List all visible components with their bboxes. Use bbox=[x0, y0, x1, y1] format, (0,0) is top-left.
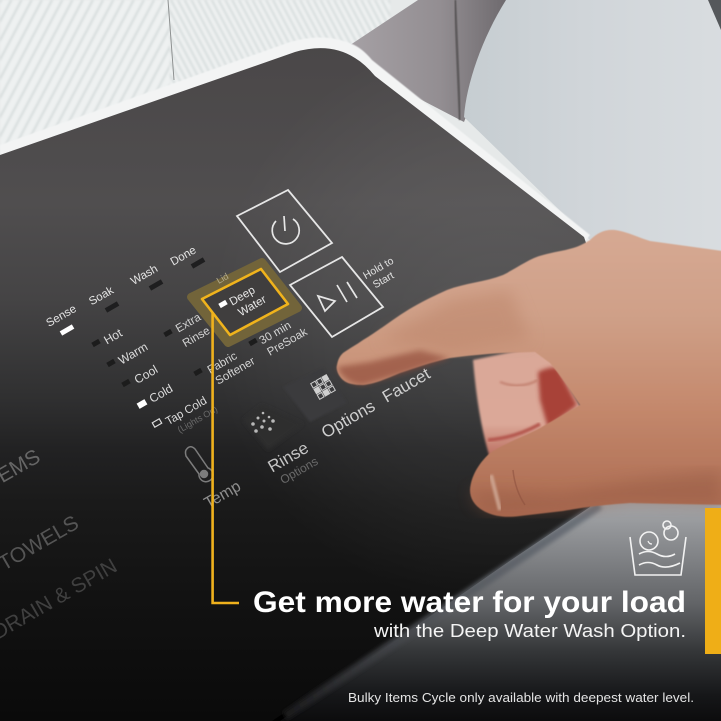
middle finger bbox=[473, 345, 585, 458]
wash options: PreSoak bbox=[265, 326, 310, 359]
headline: Get more water for your load bbox=[253, 586, 686, 619]
thermometer icon bbox=[186, 447, 213, 482]
wash options: Fabric bbox=[206, 350, 240, 377]
deep water highlight: Deep bbox=[228, 284, 257, 308]
index finger tone bbox=[380, 290, 530, 352]
temperature options: Warm bbox=[116, 340, 150, 367]
soft light on right of panel bbox=[312, 144, 586, 524]
icon: laundry tub bbox=[630, 521, 686, 575]
hand body with index and thumb bbox=[337, 230, 721, 517]
dark corner sliver bbox=[708, 0, 721, 30]
hand bbox=[337, 230, 721, 517]
footnote: Bulky Items Cycle only available with deepest water level. bbox=[348, 691, 694, 705]
background: white bowl on the right bbox=[464, 0, 721, 260]
wash options: 30 min bbox=[258, 320, 293, 347]
index fingertip shading bbox=[337, 350, 450, 385]
background: pleated washer drum bbox=[0, 0, 721, 260]
start pause button bbox=[290, 257, 383, 337]
status indicators row: Done bbox=[169, 244, 198, 268]
yellow side bar bbox=[705, 508, 721, 654]
control panel rim bbox=[0, 37, 590, 300]
power button bbox=[237, 190, 332, 272]
deep water highlight bbox=[191, 262, 298, 343]
wash options: Extra bbox=[174, 311, 204, 335]
lower rim band bbox=[285, 505, 600, 716]
control labels bbox=[202, 364, 434, 512]
cycle labels bbox=[0, 445, 121, 644]
temperature options: Cold bbox=[147, 381, 175, 406]
control labels: Faucet bbox=[379, 364, 434, 406]
subheading: with the Deep Water Wash Option. bbox=[373, 621, 686, 641]
option keys bbox=[243, 368, 347, 450]
temperature options: (Lights On) bbox=[176, 404, 219, 435]
control labels: Rinse bbox=[265, 438, 312, 476]
status indicators row: Sense bbox=[44, 303, 79, 330]
deep water highlight: Water bbox=[236, 294, 269, 319]
wash options: Rinse bbox=[181, 325, 212, 350]
temperature options bbox=[91, 325, 219, 435]
temperature options: Hot bbox=[101, 325, 125, 347]
control labels: Temp bbox=[202, 478, 244, 512]
temperature options: Cool bbox=[132, 362, 160, 387]
deep water highlight: Lid bbox=[215, 271, 230, 286]
wash options bbox=[163, 311, 310, 387]
status indicators row: Wash bbox=[129, 263, 160, 288]
hold to start label: Start bbox=[371, 270, 396, 291]
status indicators row: Soak bbox=[87, 285, 116, 308]
yellow callout line bbox=[213, 313, 239, 603]
temperature options: Tap Cold bbox=[164, 395, 209, 428]
control labels: Options bbox=[278, 454, 320, 487]
lower right surface bbox=[280, 500, 721, 721]
status indicators row bbox=[44, 244, 205, 336]
control labels: Options bbox=[318, 396, 378, 442]
hold to start label: Hold to bbox=[361, 255, 396, 282]
wash options: Softener bbox=[214, 355, 257, 387]
thumb and palm shading bbox=[470, 470, 721, 514]
